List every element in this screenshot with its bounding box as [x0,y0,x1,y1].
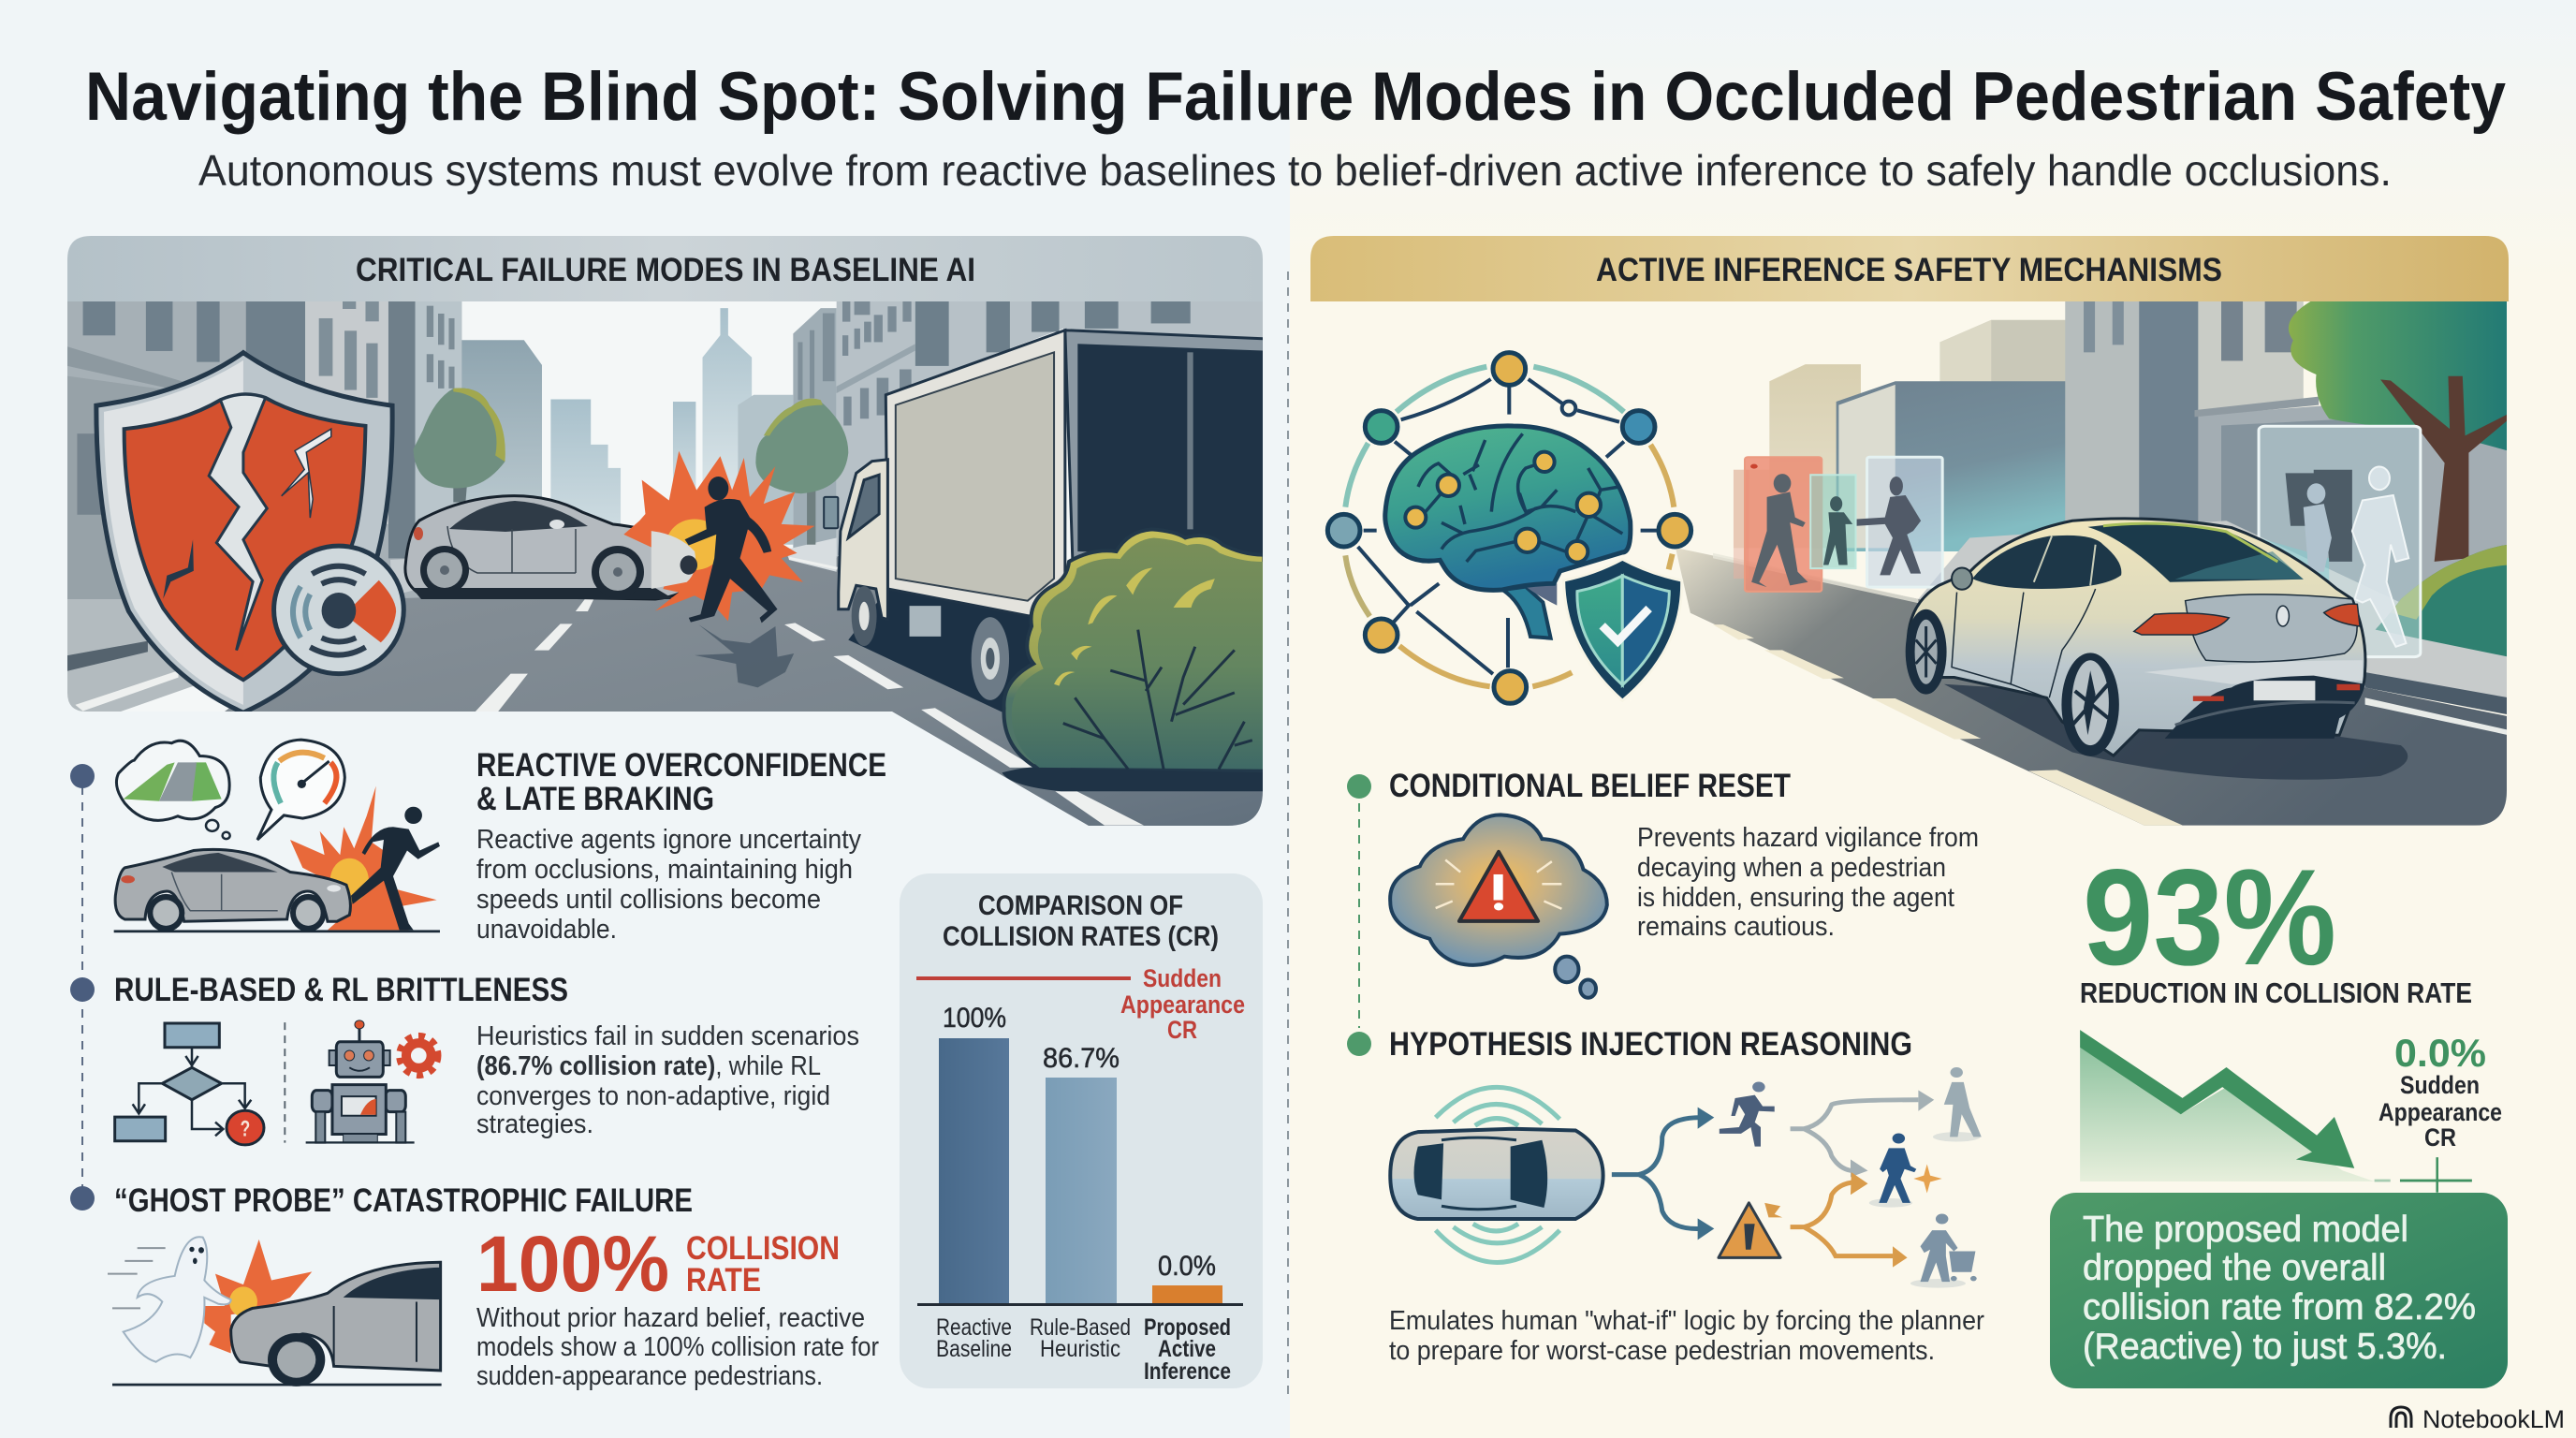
trend label: Sudden [2400,1071,2480,1099]
tree and bush [2289,300,2509,451]
panel: comparison bar chart [900,873,1263,1388]
explosion [623,451,815,622]
callout: result box: collision rate from 82.2% [2083,1287,2476,1328]
left tree [453,487,467,502]
body text [476,825,861,945]
section: reactive overconfidence [70,740,886,945]
subtitle: Autonomous systems must evolve from reactive baselines to belief-driven active inference to safely handle occlusions. [198,146,2392,195]
body text [1389,1306,1984,1366]
section heading: CONDITIONAL BELIEF RESET [1389,768,1791,804]
body text: is hidden, ensuring the agent [1637,883,1954,913]
silver car [405,496,697,599]
reference line: sudden appearance: Appearance [1120,990,1245,1019]
icon: flowchart and robot: ? [241,1117,250,1141]
timeline connector [81,786,83,1189]
delivery truck [848,590,1031,712]
watermark: NotebookLM: NotebookLM [2422,1405,2565,1433]
stat: 100% collision rate [476,1220,840,1308]
bar value labels: 86.7% [1043,1043,1120,1074]
chart heading: COMPARISON OF [978,890,1183,921]
virtual pedestrian boxes [1734,470,1744,579]
body text: Emulates human "what-if" logic by forcing the planner [1389,1306,1984,1336]
body text: unavoidable. [476,915,617,945]
sidewalk [1918,521,2509,713]
bullet [70,977,95,1002]
bar value labels [943,1003,1216,1282]
category labels: Reactive [936,1314,1012,1341]
body text [476,1021,859,1139]
trend label: CR [2424,1123,2456,1152]
body text [1637,823,1979,942]
sidewalk [56,595,179,655]
category labels: Rule-Based [1030,1314,1131,1341]
category labels: Inference [1144,1358,1231,1385]
chart heading: COLLISION RATES (CR) [943,921,1219,952]
road surface [225,556,1263,826]
icon: overconfident car collision [114,740,440,932]
section heading: RULE-BASED & RL BRITTLENESS [114,972,568,1008]
callout: result box: The proposed model [2083,1210,2408,1250]
section: rule-based brittleness [70,972,859,1145]
body text: remains cautious. [1637,912,1835,942]
section: ghost probe [70,1182,879,1391]
icon: ghost and car crash [108,1237,442,1387]
chart: falling collision trend [2080,1030,2502,1193]
body text: to prepare for worst-case pedestrian movements. [1389,1336,1935,1366]
bullet [70,1186,95,1211]
icon: brain network with shield [1327,353,1691,703]
pedestrian silhouette [708,477,728,500]
bullet [1347,1032,1371,1056]
body text: decaying when a pedestrian [1637,853,1946,883]
panel heading band [67,236,1263,301]
timeline connector [1358,803,1360,1028]
body text: speeds until collisions become [476,885,821,915]
category labels [936,1314,1231,1385]
autonomous sedan [1944,684,2408,780]
body text [476,1303,879,1391]
road [1676,548,2509,826]
distant towers [651,300,837,301]
bar value labels: 100% [943,1003,1006,1034]
body text: Without prior hazard belief, reactive [476,1303,865,1333]
panel heading band [1310,236,2509,301]
section heading: REACTIVE OVERCONFIDENCE [476,747,886,784]
body text: Reactive agents ignore uncertainty [476,825,861,855]
bullet [70,764,95,788]
stat: 93% reduction: 93% [2083,841,2336,993]
icon: flowchart and robot [115,1020,438,1145]
section: hypothesis injection [1347,1026,1984,1366]
section: conditional belief reset [1347,768,1979,998]
section heading second line: & LATE BRAKING [476,781,714,817]
body text: Heuristics fail in sudden scenarios [476,1021,859,1051]
chart heading [943,890,1219,952]
right tree [807,491,815,545]
stat: 100% collision rate: RATE [686,1262,761,1299]
callout: result box [2050,1193,2508,1388]
right building block [837,300,1264,558]
stat: 100% collision rate: COLLISION [686,1230,840,1267]
stat: 100% collision rate: 100% [476,1220,669,1308]
buildings [1734,470,1744,549]
reference line: sudden appearance: CR [1167,1016,1197,1044]
panel: active inference safety mechanisms [1310,236,2509,1388]
icon: branching hypotheses [1390,1067,1982,1288]
callout: result box: dropped the overall [2083,1248,2386,1288]
bullet [1347,774,1371,799]
stat: 93% reduction [2080,841,2472,1009]
category labels: Proposed [1144,1314,1231,1341]
body text: (86.7% collision rate), while RL [476,1051,821,1081]
sidewalk [785,537,837,572]
body text: strategies. [476,1109,593,1139]
illustration: autonomous car scene [1676,300,2509,826]
bush [1002,767,1264,791]
panel heading: ACTIVE INFERENCE SAFETY MECHANISMS [1596,252,2222,288]
body text: sudden-appearance pedestrians. [476,1361,823,1391]
category labels: Heuristic [1040,1336,1120,1362]
trend label: 0.0% [2394,1031,2486,1075]
category labels: Baseline [936,1336,1012,1362]
road dashes [784,623,1144,826]
body text: models show a 100% collision rate for [476,1332,879,1362]
panel: critical failure modes [56,236,1310,1391]
body text: from occlusions, maintaining high [476,855,853,885]
radar badge [274,546,403,674]
section heading: HYPOTHESIS INJECTION REASONING [1389,1026,1912,1063]
trend label: Appearance [2378,1098,2502,1126]
reference line: sudden appearance: Sudden [1143,964,1222,992]
category labels: Active [1158,1336,1216,1362]
icon: warning cloud [1390,814,1607,998]
cracked shield [96,353,392,712]
bar value labels: 0.0% [1158,1251,1216,1282]
stat: 93% reduction: REDUCTION IN COLLISION RATE [2080,976,2472,1009]
body text: Prevents hazard vigilance from [1637,823,1979,853]
bars [917,1038,1243,1306]
trend label [2378,1031,2502,1152]
body text: converges to non-adaptive, rigid [476,1081,830,1111]
callout: result box: (Reactive) to just 5.3%. [2083,1327,2447,1367]
illustration: street collision scene [56,300,1310,843]
reference line: sudden appearance [916,964,1245,1044]
left buildings and skyline [461,340,542,501]
panel heading: CRITICAL FAILURE MODES IN BASELINE AI [356,252,975,288]
section heading: “GHOST PROBE” CATASTROPHIC FAILURE [114,1182,693,1219]
